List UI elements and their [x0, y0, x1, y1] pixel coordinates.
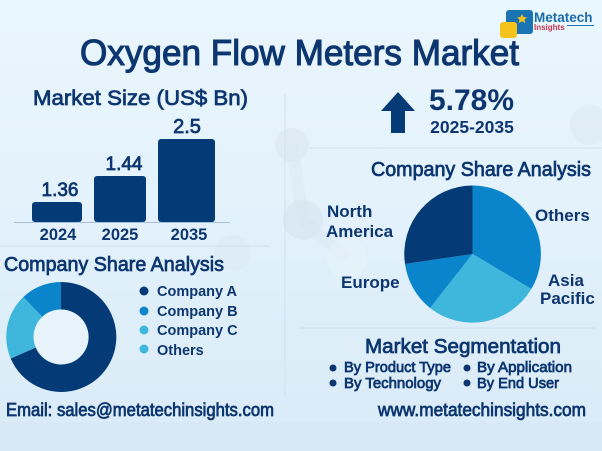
bar chart: market size: 2025 — [102, 226, 138, 244]
heading: market segmentation: Market Segmentation — [365, 336, 561, 358]
donut legend: Company C — [157, 323, 238, 339]
growth rate: 5.78% — [429, 84, 514, 117]
donut legend — [140, 284, 238, 359]
donut legend: Others — [157, 343, 204, 359]
segmentation list: By Application — [477, 359, 572, 376]
website: www.metatechinsights.com — [377, 400, 586, 420]
bar chart: market size: 1.44 — [106, 154, 143, 175]
pie labels: Europe — [341, 273, 400, 292]
pie labels: America — [326, 222, 394, 241]
donut chart: company share — [6, 282, 116, 392]
title: Oxygen Flow Meters Market — [80, 32, 519, 73]
heading: company share analysis left: Company Share Analysis — [4, 254, 224, 276]
pie labels: Pacific — [540, 289, 595, 308]
icon: up arrow — [381, 92, 415, 133]
donut legend: Company A — [157, 284, 238, 300]
logo — [500, 10, 594, 38]
segmentation list: By Technology — [344, 375, 441, 392]
pie chart: regions — [404, 186, 541, 323]
bar chart: market size: 2024 — [40, 226, 77, 244]
heading: market size: Market Size (US$ Bn) — [33, 86, 248, 110]
pie labels — [326, 202, 595, 308]
contact email: Email: sales@metatechinsights.com — [6, 400, 274, 420]
forecast period: 2025-2035 — [430, 117, 514, 137]
donut legend: Company B — [157, 304, 238, 320]
pie labels: Asia — [548, 271, 584, 290]
pie labels: North — [327, 202, 372, 221]
bar chart: market size: 2.5 — [173, 116, 201, 138]
logo: Insights — [534, 23, 565, 32]
segmentation list — [330, 359, 572, 392]
segmentation list: By Product Type — [344, 359, 451, 376]
bar chart: market size — [14, 116, 230, 244]
logo: Metatech — [534, 10, 593, 25]
pie labels: Others — [535, 206, 590, 225]
heading: company share analysis right: Company Share Analysis — [371, 159, 591, 181]
bar chart: market size: 2035 — [171, 226, 207, 244]
segmentation list: By End User — [477, 375, 559, 392]
bar chart: market size: 1.36 — [42, 180, 78, 201]
